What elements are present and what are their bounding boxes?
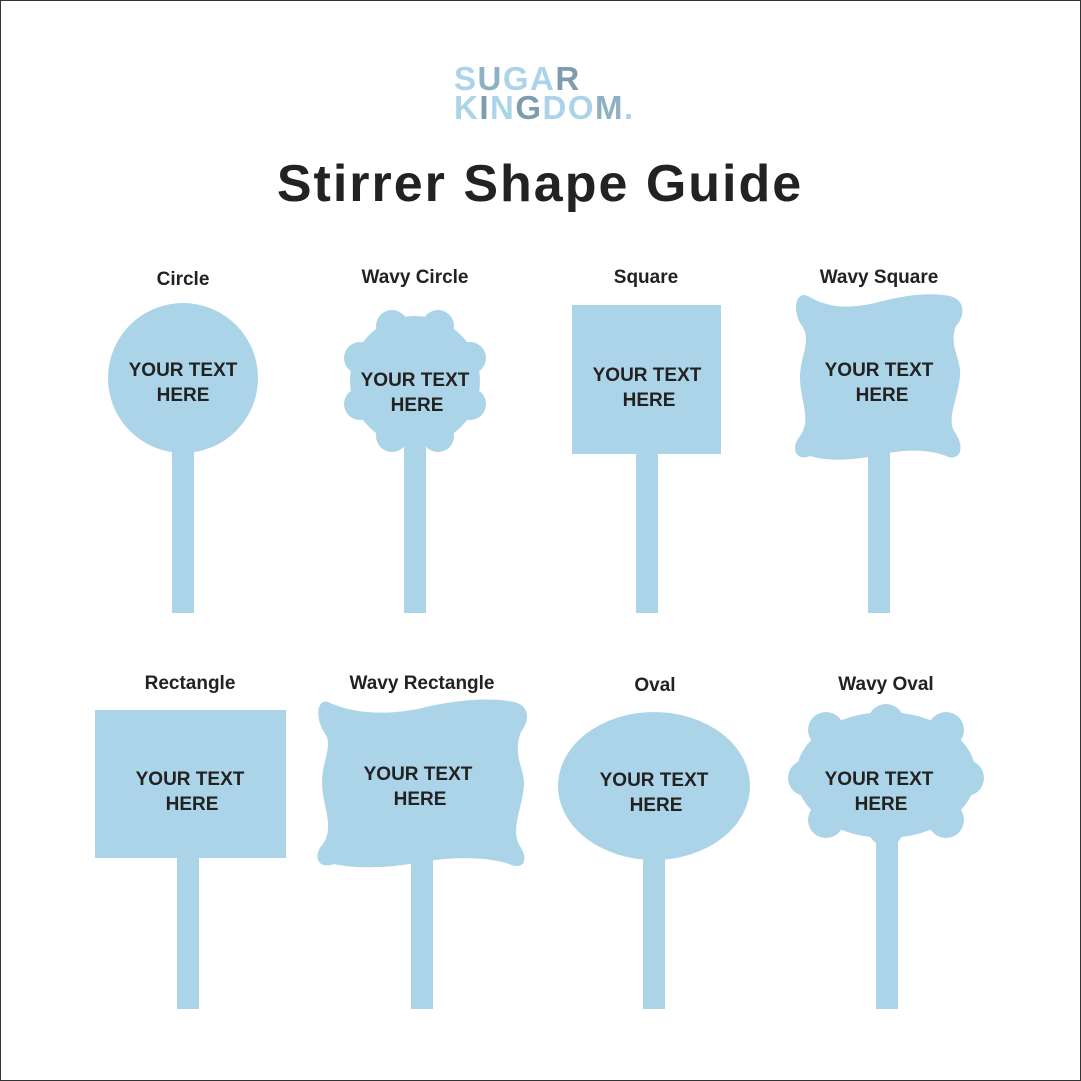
logo	[454, 60, 635, 126]
item: wavy circle: HERE	[391, 395, 443, 416]
item: square: YOUR TEXT	[593, 365, 702, 386]
item: wavy square	[795, 267, 963, 613]
item: wavy oval: YOUR TEXT	[825, 769, 934, 790]
logo: SUGAR	[454, 60, 581, 97]
item: wavy square: YOUR TEXT	[825, 360, 934, 381]
item: rectangle	[95, 673, 286, 1009]
item: wavy oval: Wavy Oval	[838, 674, 934, 695]
item: wavy rectangle	[317, 673, 527, 1009]
item: rectangle: YOUR TEXT	[136, 769, 245, 790]
item: rectangle: Rectangle	[145, 673, 235, 694]
item: wavy circle: YOUR TEXT	[361, 370, 470, 391]
item: wavy oval	[788, 674, 984, 1009]
item: wavy circle	[344, 267, 486, 613]
title: Stirrer Shape Guide	[277, 155, 803, 213]
item: wavy square: Wavy Square	[820, 267, 938, 288]
item: oval: HERE	[630, 795, 682, 816]
item: wavy oval: HERE	[855, 794, 907, 815]
item: wavy rectangle: YOUR TEXT	[364, 764, 473, 785]
item: wavy square: HERE	[856, 385, 908, 406]
item: circle: HERE	[157, 385, 209, 406]
item: square: Square	[614, 267, 678, 288]
item: oval: YOUR TEXT	[600, 770, 709, 791]
item: rectangle: HERE	[166, 794, 218, 815]
item: wavy rectangle: HERE	[394, 789, 446, 810]
item: oval: Oval	[634, 675, 676, 696]
item: wavy rectangle: Wavy Rectangle	[349, 673, 495, 694]
item: circle	[108, 269, 258, 613]
item: square: HERE	[623, 390, 675, 411]
item: oval	[558, 675, 750, 1009]
item: circle: Circle	[157, 269, 209, 290]
item: wavy circle: Wavy Circle	[361, 267, 469, 288]
item: square	[572, 267, 721, 613]
item: circle: YOUR TEXT	[129, 360, 238, 381]
logo: KINGDOM.	[454, 89, 635, 126]
